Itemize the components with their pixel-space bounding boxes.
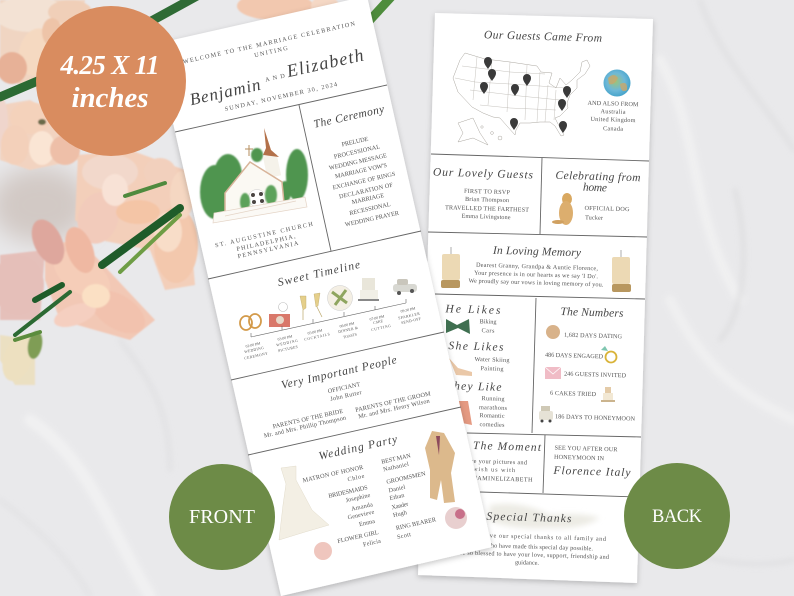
front card bbox=[155, 0, 492, 596]
panel: wedding party bbox=[279, 431, 467, 560]
badge: front bbox=[169, 464, 275, 570]
icon: getaway car bbox=[393, 279, 417, 295]
panel: church illustration bbox=[200, 128, 308, 223]
panel: celebrating from home: Celebrating from bbox=[555, 170, 641, 184]
text: and also from: AND ALSO FROM bbox=[587, 100, 639, 108]
panel: very important people: OFFICIANT bbox=[327, 381, 361, 395]
panel: very important people: PARENTS OF THE BRIDE bbox=[272, 408, 344, 430]
panel: the ceremony: PRELUDE bbox=[341, 136, 369, 148]
panel: he likes, she likes, they like: marathons bbox=[479, 404, 508, 412]
panel: he likes, she likes, they like: Cars bbox=[481, 327, 495, 335]
icon: tiered cake bbox=[601, 387, 615, 402]
panel: sweet timeline bbox=[240, 259, 421, 361]
badge: back bbox=[624, 463, 730, 569]
header: couple names and date: Benjamin bbox=[188, 75, 262, 109]
panel: celebrating from home: OFFICIAL DOG bbox=[584, 205, 630, 213]
panel: very important people: PARENTS OF THE GROOM bbox=[355, 390, 432, 414]
panel: sweet timeline: PICTURES bbox=[278, 345, 298, 353]
panel: he likes, she likes, they like: Biking bbox=[479, 318, 497, 326]
US map with pins bbox=[453, 53, 590, 145]
panel: wedding party: Scott bbox=[396, 531, 412, 541]
panel: wedding party: MATRON OF HONOR bbox=[302, 464, 365, 484]
panel: he likes, she likes, they like: She Likes bbox=[448, 340, 504, 354]
panel: very important people: Very Important People bbox=[280, 354, 398, 392]
panel: sweet timeline: 07:00 PM bbox=[369, 314, 385, 322]
panel: wedding party: Daniel bbox=[388, 484, 406, 494]
panel: special thanks: We want to give our special thanks to all family and bbox=[448, 531, 607, 543]
panel: wedding party: Genevieve bbox=[347, 509, 375, 521]
panel: wedding party: Nathaniel bbox=[383, 461, 410, 473]
panel: he likes, she likes, they like: Painting bbox=[480, 365, 504, 373]
panel: wedding party: Xander bbox=[391, 501, 409, 511]
icon: wedding rings bbox=[240, 314, 261, 330]
panel: our lovely guests bbox=[433, 167, 534, 221]
panel: honeymoon: SEE YOU AFTER OUR bbox=[554, 445, 618, 453]
icon: bouquet bbox=[546, 325, 560, 339]
map pins bbox=[480, 57, 571, 133]
panel: sweet timeline: COCKTAILS bbox=[304, 332, 330, 342]
panel: sweet timeline: CEREMONY bbox=[244, 351, 268, 361]
panel: the ceremony: EXCHANGE OF RINGS bbox=[332, 171, 397, 191]
panel: our lovely guests: Our Lovely Guests bbox=[433, 167, 534, 181]
panel: wedding party: Chloe bbox=[347, 473, 365, 483]
church address: PHILADELPHIA, bbox=[236, 233, 296, 253]
header: couple names and date: Elizabeth bbox=[284, 45, 365, 81]
flower blooms bbox=[0, 0, 339, 385]
panel: sweet timeline: SPARKLER bbox=[398, 312, 421, 320]
panel: special thanks: Special Thanks bbox=[486, 511, 572, 525]
panel: in loving memory bbox=[441, 245, 631, 292]
panel: he likes, she likes, they like: comedies bbox=[479, 421, 505, 429]
panel: the moment: #BENJAMINELIZABETH bbox=[457, 474, 533, 484]
panel: sweet timeline: 09:30 PM bbox=[400, 306, 416, 314]
panel: celebrating from home: Tucker bbox=[585, 214, 603, 222]
panel: he likes, she likes, they like: He Likes bbox=[444, 303, 501, 317]
flowers and stems decoration bbox=[0, 0, 392, 385]
panel: sweet timeline: CUTTING bbox=[371, 324, 391, 332]
panel: the ceremony: RECESSIONAL bbox=[349, 201, 391, 217]
panel: honeymoon: Florence Italy bbox=[552, 465, 632, 479]
panel: the ceremony: WEDDING MESSAGE bbox=[328, 152, 388, 172]
icon: dinner plate bbox=[328, 286, 352, 310]
text: and also from: Australia bbox=[600, 108, 626, 116]
timeline axis bbox=[251, 299, 406, 337]
badge: front: FRONT bbox=[189, 506, 255, 528]
badge: size 4.25 x 11 inches: inches bbox=[72, 82, 148, 114]
icon: champagne glasses bbox=[300, 293, 322, 320]
text: and also from: United Kingdom bbox=[590, 116, 636, 124]
church body bbox=[225, 162, 284, 216]
back card bbox=[418, 13, 653, 583]
badge: size 4.25 x 11 inches: 4.25 X 11 bbox=[60, 50, 160, 80]
panel: the ceremony: PROCESSIONAL bbox=[333, 143, 381, 161]
panel: our lovely guests: Brian Thompson bbox=[465, 196, 509, 204]
icon: camera bbox=[269, 302, 290, 327]
panel: the ceremony: The Ceremony bbox=[313, 103, 386, 131]
panel: the moment bbox=[457, 440, 542, 484]
church address: PENNSYLVANIA bbox=[237, 240, 300, 260]
header: couple names and date bbox=[182, 20, 365, 113]
panel: in loving memory: Dearest Granny, Grandpa & Auntie Florence, bbox=[476, 262, 599, 272]
panel: special thanks: guidance. bbox=[515, 559, 540, 567]
panel: the numbers: 246 GUESTS INVITED bbox=[564, 371, 627, 379]
green stems bbox=[0, 0, 392, 340]
icon: gold ring bbox=[601, 346, 616, 362]
panel: sweet timeline: DINNER & bbox=[338, 326, 358, 334]
panel: the numbers: 1,682 DAYS DATING bbox=[564, 332, 623, 340]
panel: the ceremony: WEDDING PRAYER bbox=[344, 209, 400, 229]
panel: wedding party: RING BEARER bbox=[395, 516, 438, 532]
panel: sweet timeline: 05:00 PM bbox=[307, 328, 323, 336]
icon: cake bbox=[358, 278, 379, 301]
icon: right candle bbox=[612, 250, 631, 292]
panel: wedding party: BRIDESMAIDS bbox=[328, 484, 369, 500]
panel: sweet timeline: Sweet Timeline bbox=[277, 259, 361, 289]
icon: envelope bbox=[545, 367, 561, 379]
panel: the numbers: The Numbers bbox=[560, 306, 624, 320]
text: and also from: Canada bbox=[603, 125, 623, 133]
panel: he likes, she likes, they like: Romantic bbox=[479, 412, 505, 420]
panel: the numbers: 186 DAYS TO HONEYMOON bbox=[555, 413, 636, 423]
panel: the ceremony: MARRIAGE bbox=[351, 192, 385, 206]
section dividers bbox=[175, 85, 461, 455]
icon: left candle bbox=[441, 247, 460, 288]
panel: our lovely guests: Emma Livingstone bbox=[461, 213, 511, 221]
section dividers bbox=[428, 154, 649, 497]
panel: our lovely guests: FIRST TO RSVP bbox=[464, 188, 511, 196]
panel: wedding party: Emma bbox=[358, 518, 376, 528]
panel: honeymoon: HONEYMOON IN bbox=[554, 454, 605, 462]
panel: in loving memory: We proudly say our vows in loving memory of you. bbox=[468, 277, 604, 289]
panel: wedding party: FLOWER GIRL bbox=[337, 529, 379, 545]
panel: sweet timeline: WEDDING bbox=[244, 346, 264, 354]
panel: in loving memory: Your presence is in our hearts as we say 'I Do'. bbox=[474, 270, 599, 280]
panel: wedding party: Josephine bbox=[345, 492, 371, 504]
church address: ST. AUGUSTINE CHURCH bbox=[214, 221, 314, 249]
panel: the moment: wish us with bbox=[473, 466, 516, 474]
header: couple names and date: SUNDAY, NOVEMBER 30, 2024 bbox=[224, 81, 338, 113]
panel: the numbers bbox=[539, 306, 636, 423]
panel: sweet timeline: CAKE bbox=[373, 319, 384, 325]
panel: he likes, she likes, they like: Running bbox=[481, 395, 505, 403]
heading: our guests came from: Our Guests Came From bbox=[484, 29, 602, 45]
panel: special thanks: everyone who have made this special day possible. bbox=[461, 542, 594, 552]
panel: wedding party: BEST MAN bbox=[381, 452, 412, 466]
panel: sweet timeline: SEND-OFF bbox=[401, 317, 421, 325]
icon: globe bbox=[604, 70, 630, 96]
text: and also from bbox=[587, 100, 639, 133]
panel: very important people: Mr. and Mrs. Henry Wilson bbox=[358, 398, 430, 420]
panel: the moment: The Moment bbox=[473, 440, 542, 454]
panel: our lovely guests: TRAVELLED THE FARTHEST bbox=[445, 204, 529, 214]
steeple bbox=[245, 128, 281, 178]
panel: very important people: Mr. and Mrs. Phillip Thompson bbox=[263, 414, 347, 440]
panel: special thanks bbox=[447, 504, 610, 567]
icon: bow tie bbox=[446, 319, 470, 334]
panel: special thanks: We are so blessed to have your love, support, friendship and bbox=[447, 549, 610, 561]
panel: the moment: Share your pictures and bbox=[461, 458, 528, 466]
panel: he likes, she likes, they like bbox=[444, 303, 510, 429]
panel: sweet timeline: 06:00 PM bbox=[339, 321, 355, 329]
icon: bouquet bbox=[445, 507, 467, 529]
panel: wedding party: Ethan bbox=[389, 492, 405, 502]
header: couple names and date: UNITING bbox=[254, 45, 289, 59]
panel: in loving memory: In Loving Memory bbox=[492, 245, 582, 259]
icon: rose bbox=[314, 542, 332, 560]
trees bbox=[200, 148, 308, 219]
icon: honeymoon car bbox=[539, 406, 553, 422]
panel: wedding party: Hugh bbox=[392, 509, 408, 519]
panel: sweet timeline: 03:00 PM bbox=[277, 334, 293, 342]
badge: size 4.25 x 11 inches bbox=[36, 6, 186, 156]
icon: wedding dress bbox=[279, 466, 329, 540]
panel: the ceremony: MARRIAGE VOW'S bbox=[334, 162, 388, 180]
panel: wedding party: Amanda bbox=[351, 501, 374, 513]
panel: the numbers: 6 CAKES TRIED bbox=[550, 390, 597, 398]
panel: sweet timeline: TOASTS bbox=[343, 333, 357, 339]
panel: sweet timeline: WEDDING bbox=[276, 339, 298, 347]
panel: he likes, she likes, they like: Water Skiing bbox=[474, 356, 510, 364]
panel: wedding party: Felicia bbox=[362, 538, 382, 548]
panel: wedding party: GROOMSMEN bbox=[386, 470, 427, 486]
panel: very important people bbox=[263, 354, 432, 440]
panel: he likes, she likes, they like: They Like bbox=[446, 380, 502, 394]
panel: sweet timeline: 02:00 PM bbox=[245, 341, 261, 349]
panel: very important people: John Rutter bbox=[330, 389, 362, 403]
icon: groom suit bbox=[425, 431, 455, 503]
panel: celebrating from home: home bbox=[583, 182, 607, 194]
header: couple names and date: AND bbox=[264, 72, 286, 84]
panel: the ceremony bbox=[313, 103, 400, 229]
icon: coral dress bbox=[458, 401, 472, 425]
panel: celebrating from home bbox=[552, 170, 641, 225]
steps bbox=[213, 197, 307, 223]
badge: back: BACK bbox=[652, 507, 703, 527]
header: couple names and date: WELCOME TO THE MARRIAGE CELEBRATION bbox=[182, 20, 356, 66]
panel: wedding party: Wedding Party bbox=[318, 433, 399, 463]
panel: honeymoon bbox=[552, 445, 632, 479]
bushes bbox=[240, 185, 277, 211]
panel: the numbers: 486 DAYS ENGAGED bbox=[545, 352, 604, 360]
icon: shoe bbox=[449, 358, 472, 376]
icon: golden retriever bbox=[552, 193, 573, 225]
panel: the ceremony: DECLARATION OF bbox=[338, 182, 394, 200]
